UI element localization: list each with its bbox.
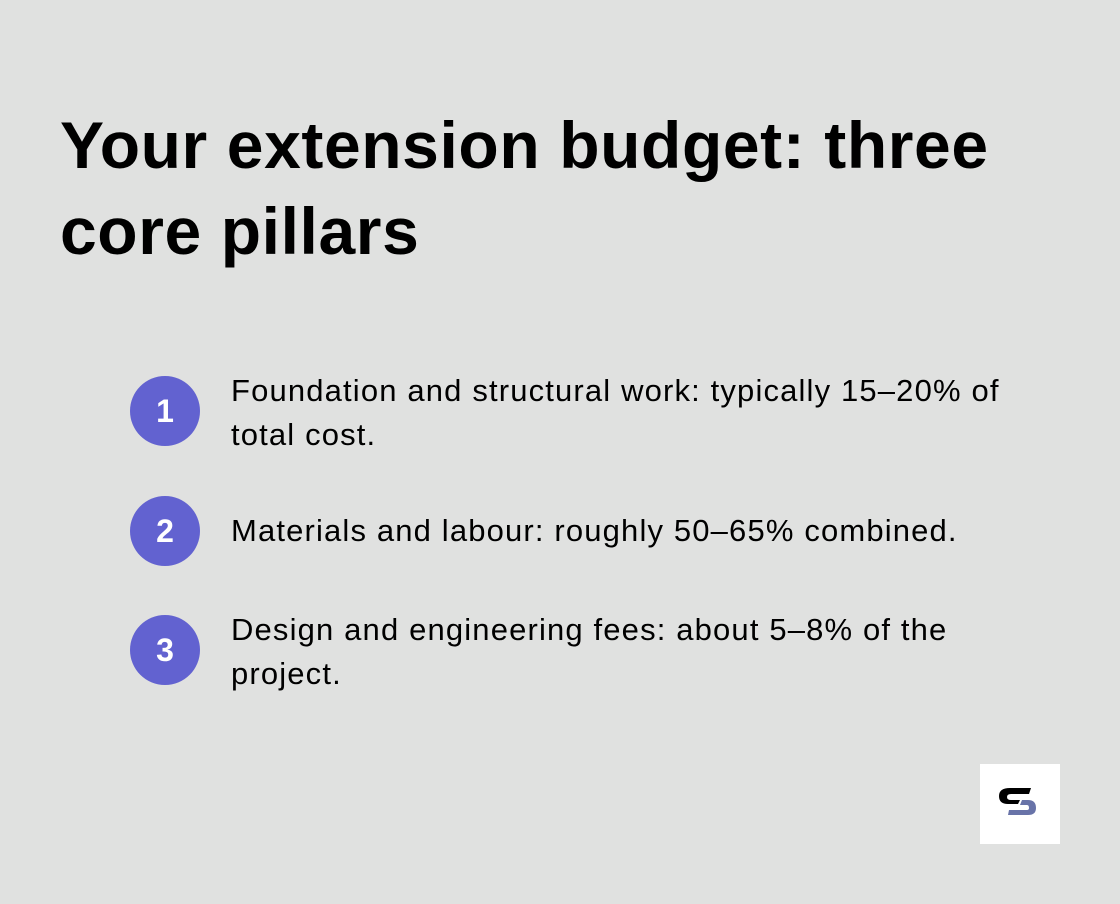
text 2: Materials and labour: roughly 50–65% combined.	[231, 513, 958, 548]
item 3	[130, 612, 947, 691]
item 1	[130, 373, 1000, 452]
text 3: Design and engineering fees: about 5–8% of the project.	[231, 612, 947, 691]
badge 1: 1	[156, 393, 174, 429]
text 1: Foundation and structural work: typically 15–20% of total cost.	[231, 373, 1000, 452]
logo	[980, 764, 1060, 844]
badge 2: 2	[156, 513, 174, 549]
title: Your extension budget: three core pillars	[60, 108, 989, 268]
item 2	[130, 496, 958, 566]
badge 3: 3	[156, 632, 174, 668]
badge 3	[130, 615, 200, 685]
badge 1	[130, 376, 200, 446]
badge 2	[130, 496, 200, 566]
